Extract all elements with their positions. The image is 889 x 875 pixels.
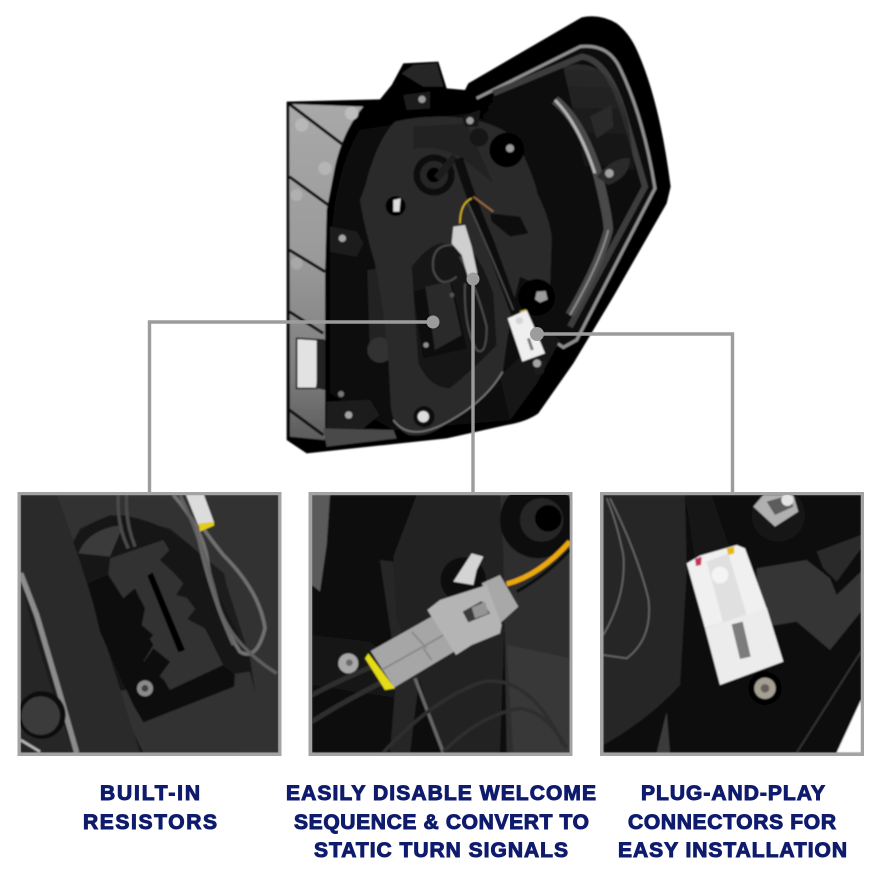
foam gasket [360, 116, 552, 436]
housing silhouette [287, 16, 671, 453]
connector line: resistors [150, 316, 440, 492]
collar [427, 585, 502, 655]
thin wire loops [433, 245, 487, 351]
bottom-right white corner [837, 700, 861, 753]
wires [118, 495, 135, 548]
rear wires [507, 542, 570, 584]
caption: built-in resistors: BUILT-IN [100, 782, 200, 805]
thick black wire [458, 158, 517, 317]
caption: plug-and-play connectors: PLUG-AND-PLAY [641, 782, 825, 805]
grommet [413, 154, 455, 196]
reflector screw [597, 158, 630, 185]
small grey connector [452, 225, 477, 278]
caption: disable welcome sequence: STATIC TURN SIGNALS [314, 839, 568, 862]
curved light ridge [555, 100, 608, 315]
panel: plug-and-play connector photo [600, 488, 864, 756]
black bosses [489, 133, 524, 167]
stud boss and stud [440, 558, 486, 596]
round plug [18, 691, 66, 739]
foam [603, 495, 687, 745]
nut and stud [752, 495, 805, 542]
yellow seal [365, 653, 395, 690]
caption: disable welcome sequence: SEQUENCE & CONVERT TO [294, 811, 589, 834]
front wires [312, 667, 383, 722]
foam edge highlight [393, 372, 503, 432]
grey connector tube section [371, 616, 457, 688]
white sleeve [186, 495, 214, 526]
white connector lower [705, 608, 783, 685]
connector line: plug and play [530, 327, 732, 492]
left ribbed plate [289, 104, 363, 440]
right foam [207, 495, 278, 753]
small sensor plug [490, 213, 528, 237]
caption: built-in resistors [83, 782, 217, 834]
foam [393, 495, 507, 753]
cavity background [21, 495, 278, 753]
caption: built-in resistors: RESISTORS [83, 811, 217, 834]
studs and screws [327, 92, 548, 428]
caption: plug-and-play connectors [618, 782, 847, 862]
dark background [603, 495, 861, 753]
dark background [312, 495, 570, 753]
screw [338, 653, 358, 673]
caption: plug-and-play connectors: CONNECTORS FOR [628, 811, 836, 834]
fins shadow [130, 590, 170, 677]
white connector upper [687, 545, 767, 628]
panel: welcome sequence connector photo [308, 482, 577, 756]
left foam [21, 495, 140, 753]
resistor block [413, 282, 467, 358]
connector line: welcome sequence [466, 272, 480, 492]
reflector clip [590, 105, 613, 138]
back section [482, 575, 518, 623]
caption: disable welcome sequence: EASILY DISABLE WELCOME [286, 782, 596, 805]
caption: plug-and-play connectors: EASY INSTALLATION [618, 839, 847, 862]
grommet [500, 495, 570, 558]
black cable [686, 496, 728, 556]
panel: built-in resistors photo [18, 492, 282, 756]
resistor base plate [88, 575, 235, 722]
white connector [508, 310, 545, 362]
lower-centre body [330, 113, 553, 430]
lower left bracket panel [355, 360, 392, 423]
reflector rim [477, 46, 655, 347]
top tab highlight [402, 63, 443, 87]
reflector dome shading [563, 65, 637, 293]
grey reflector area [757, 560, 861, 650]
pin colours [695, 557, 702, 566]
screw [137, 680, 153, 696]
screw [748, 672, 782, 705]
photo: tail light rear housing [287, 16, 671, 453]
resistor top [108, 540, 223, 690]
gasket inner cut-out [412, 243, 497, 388]
caption: disable welcome sequence [286, 782, 596, 862]
